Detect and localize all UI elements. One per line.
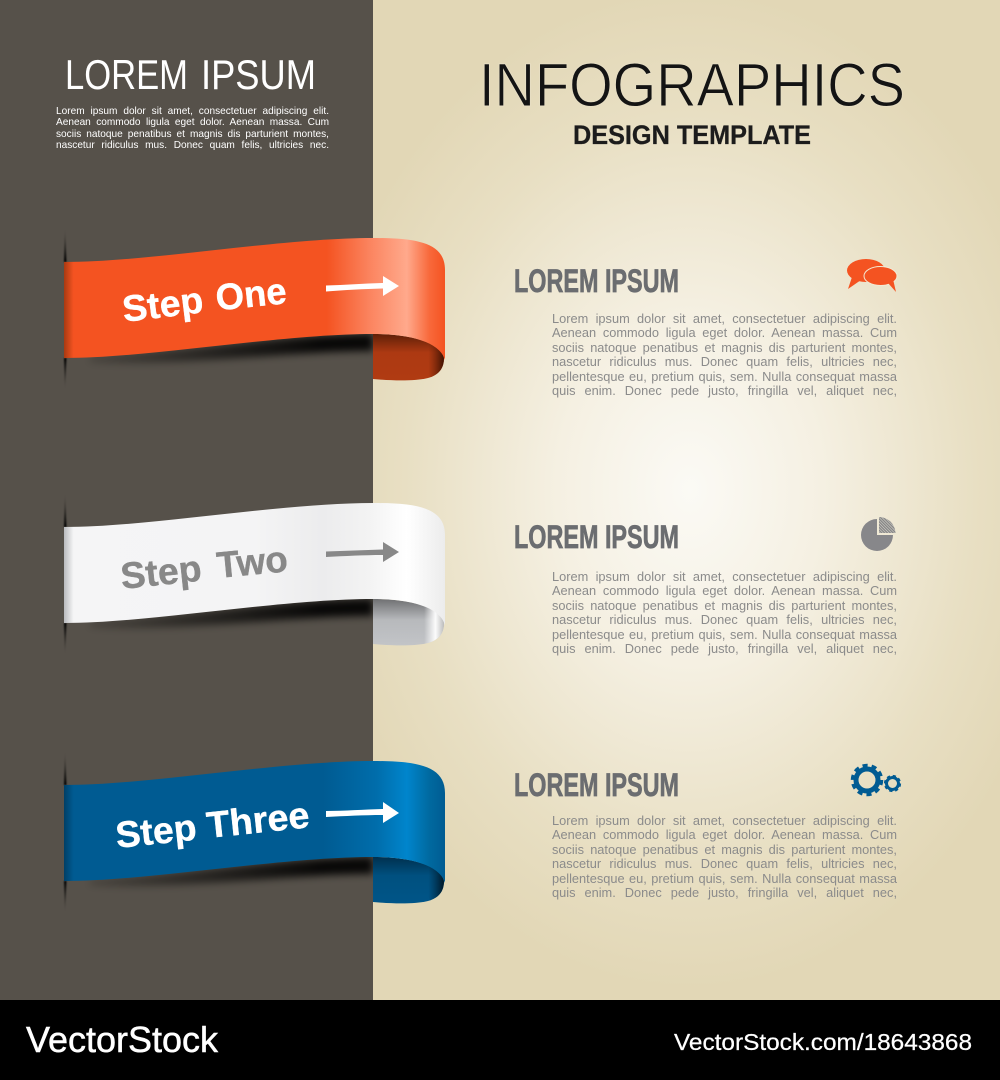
footer url: VectorStock.com/18643868 [674, 1029, 972, 1055]
ribbon: step one [63, 238, 445, 381]
text block: section two: nascetur ridiculus mus. Donec quam felis, ultricies nec, [552, 612, 897, 627]
footer bar [0, 1000, 1000, 1080]
ribbon: step three: Three [205, 794, 311, 846]
text block: section two: Aenean commodo ligula eget dolor. Aenean massa. Cum [552, 583, 897, 598]
intro text: Lorem ipsum dolor sit amet, consectetuer adipiscing elit. [56, 106, 329, 117]
icon: pie chart [861, 517, 896, 551]
text block: section three [552, 813, 897, 900]
text block: section three: sociis natoque penatibus et magnis dis parturient montes, [552, 842, 897, 857]
text block: section two: sociis natoque penatibus et magnis dis parturient montes, [552, 598, 897, 613]
ribbon: step one: Step [120, 279, 205, 330]
text block: section one: Aenean commodo ligula eget dolor. Aenean massa. Cum [552, 325, 897, 340]
heading: section one: LOREM IPSUM [514, 263, 679, 299]
ribbon: step two: Two [215, 538, 289, 586]
ribbon: step one: One [214, 270, 288, 318]
ribbon: step two [63, 502, 445, 646]
text block: section one: pellentesque eu, pretium quis, sem. Nulla consequat massa [552, 369, 897, 384]
intro text: nascetur ridiculus mus. Donec quam felis, ultricies nec. [56, 140, 329, 151]
text block: section two: quis enim. Donec pede justo, fringilla vel, aliquet nec, [552, 641, 897, 656]
panel: dark left column [0, 0, 373, 1000]
text block: section three: Aenean commodo ligula eget dolor. Aenean massa. Cum [552, 827, 897, 842]
background: cream panel [373, 0, 1000, 1000]
ribbon: step three: Step [114, 807, 198, 856]
ribbon: step two: Step [119, 548, 203, 597]
heading: section three: LOREM IPSUM [514, 767, 679, 803]
text block: section two: pellentesque eu, pretium quis, sem. Nulla consequat massa [552, 627, 897, 642]
text block: section three: Lorem ipsum dolor sit amet, consectetuer adipiscing elit. [552, 813, 897, 828]
title: INFOGRAPHICS [479, 51, 905, 119]
text block: section one: quis enim. Donec pede justo, fringilla vel, aliquet nec, [552, 383, 897, 398]
text block: section three: pellentesque eu, pretium quis, sem. Nulla consequat massa [552, 871, 897, 886]
text block: section two: Lorem ipsum dolor sit amet, consectetuer adipiscing elit. [552, 569, 897, 584]
text block: section three: nascetur ridiculus mus. Donec quam felis, ultricies nec, [552, 856, 897, 871]
ribbon: step three [63, 760, 445, 904]
footer logo: VectorStock [26, 1019, 219, 1060]
icon: gears [852, 766, 900, 794]
intro text [56, 106, 329, 151]
text block: section one: Lorem ipsum dolor sit amet, consectetuer adipiscing elit. [552, 311, 897, 326]
text block: section one [552, 311, 897, 398]
intro text: Aenean commodo ligula eget dolor. Aenean massa. Cum [56, 117, 329, 128]
text block: section three: quis enim. Donec pede justo, fringilla vel, aliquet nec, [552, 885, 897, 900]
heading: section two: LOREM IPSUM [514, 519, 679, 555]
left heading: IPSUM [201, 51, 316, 98]
intro text: sociis natoque penatibus et magnis dis parturient montes, [56, 129, 329, 140]
text block: section one: sociis natoque penatibus et magnis dis parturient montes, [552, 340, 897, 355]
icon: speech bubbles [847, 259, 897, 292]
left heading [65, 51, 316, 98]
text block: section two [552, 569, 897, 656]
left heading: LOREM [65, 51, 188, 98]
subtitle: DESIGN TEMPLATE [573, 120, 811, 150]
text block: section one: nascetur ridiculus mus. Donec quam felis, ultricies nec, [552, 354, 897, 369]
